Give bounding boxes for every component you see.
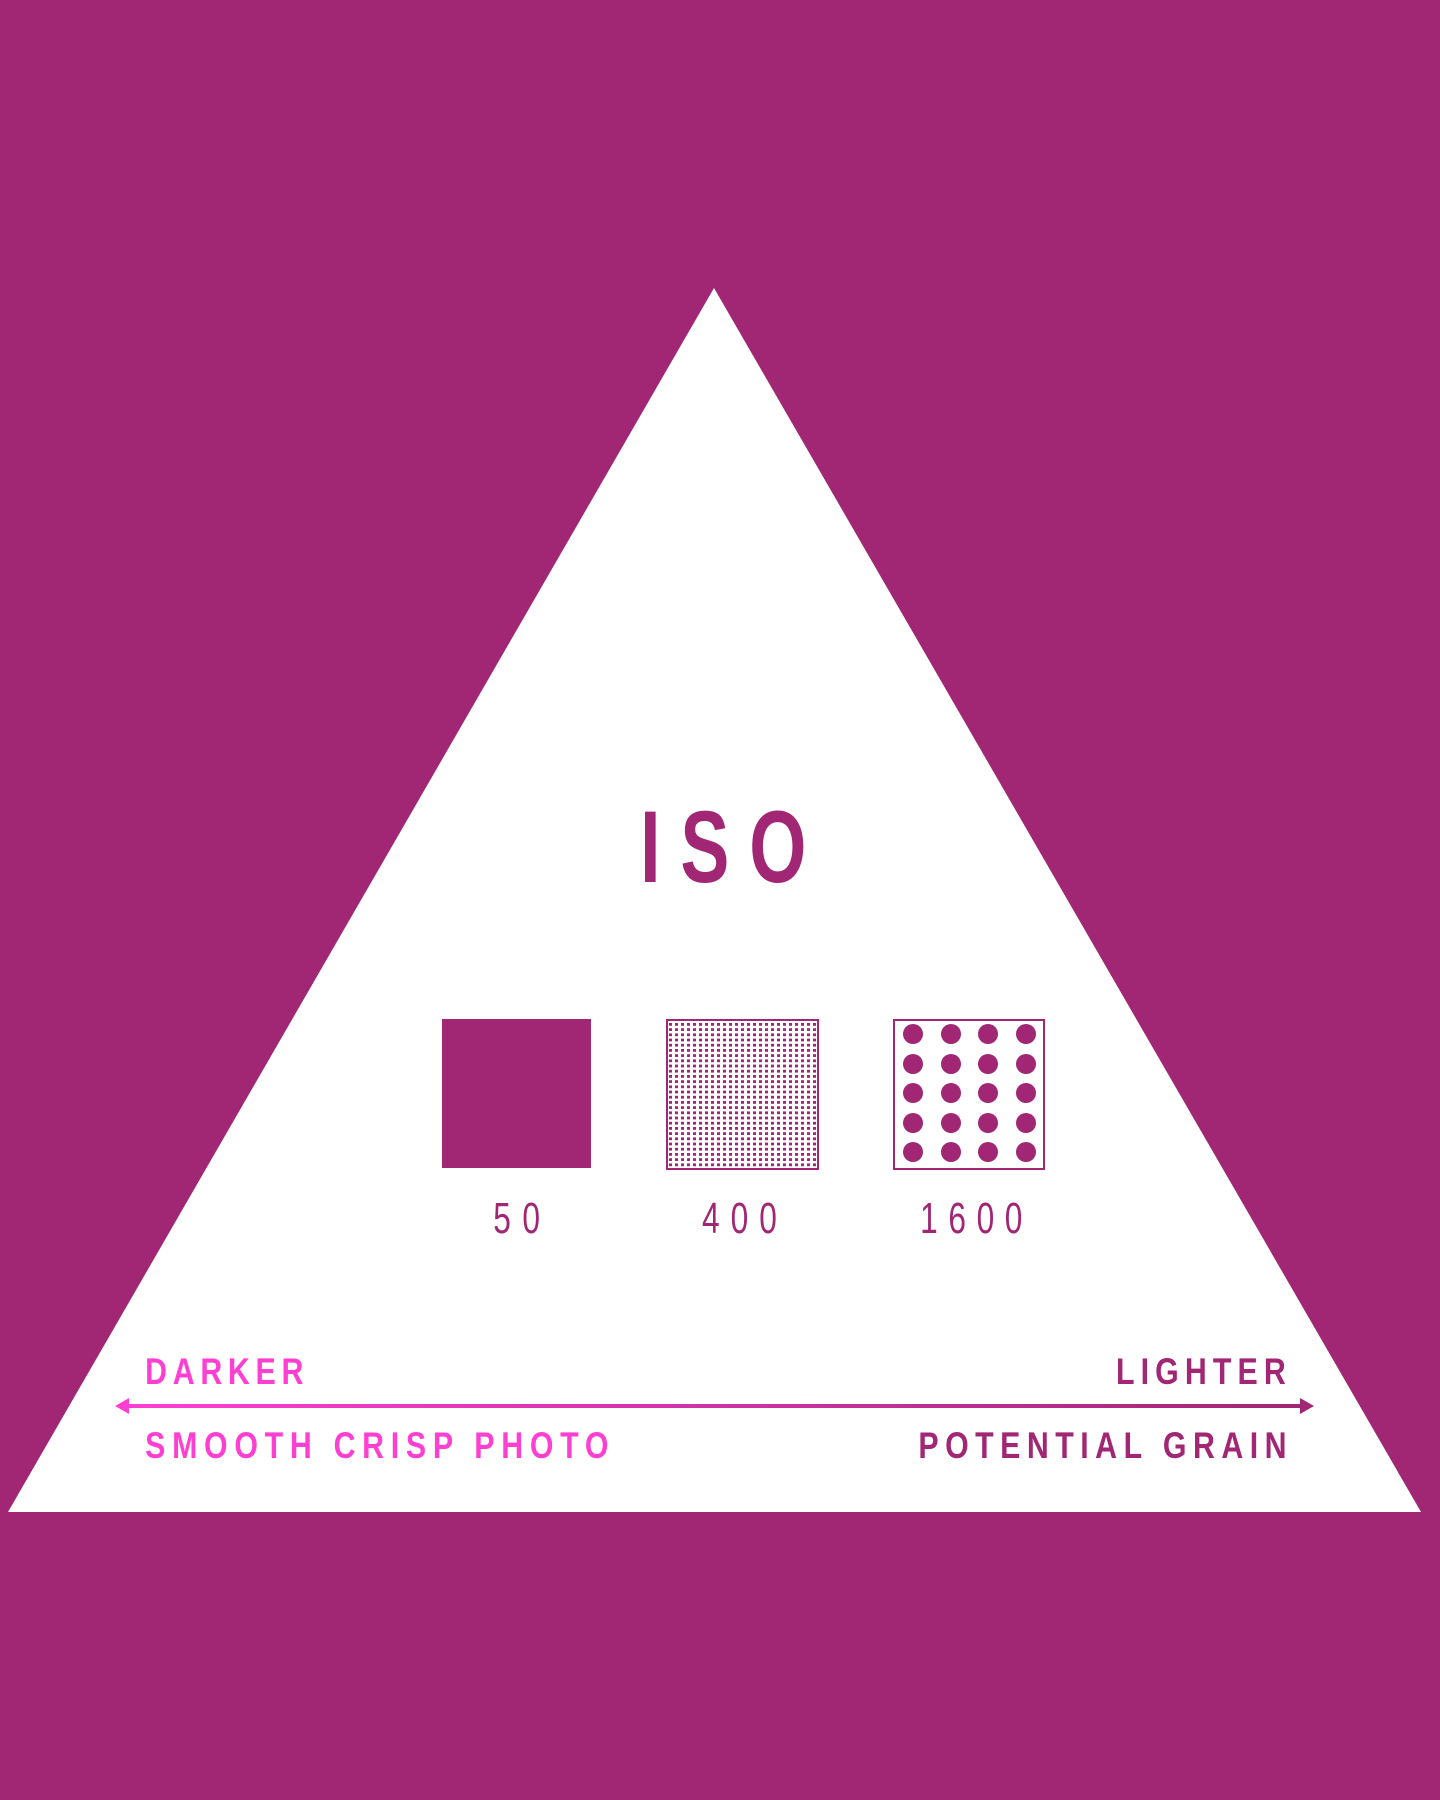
- triangle panel: [8, 288, 1421, 1512]
- text: POTENTIAL GRAIN: POTENTIAL GRAIN: [918, 1425, 1287, 1467]
- arrow: scale: [115, 1398, 1314, 1414]
- labels: ISO values: [493, 1194, 1022, 1243]
- label: 50: 50: [493, 1194, 540, 1243]
- swatch: ISO 1600 coarse grain: [894, 1020, 1044, 1169]
- text: LIGHTER: LIGHTER: [1116, 1351, 1286, 1393]
- text: DARKER: DARKER: [145, 1351, 303, 1393]
- label: 1600: 1600: [920, 1194, 1022, 1243]
- swatch: ISO 400 fine grain: [667, 1020, 818, 1169]
- text: SMOOTH CRISP PHOTO: SMOOTH CRISP PHOTO: [145, 1425, 608, 1467]
- title: ISO: ISO: [640, 790, 806, 904]
- swatch: ISO 50 solid: [442, 1019, 591, 1168]
- scale labels: [145, 1351, 1287, 1467]
- label: 400: 400: [702, 1194, 777, 1243]
